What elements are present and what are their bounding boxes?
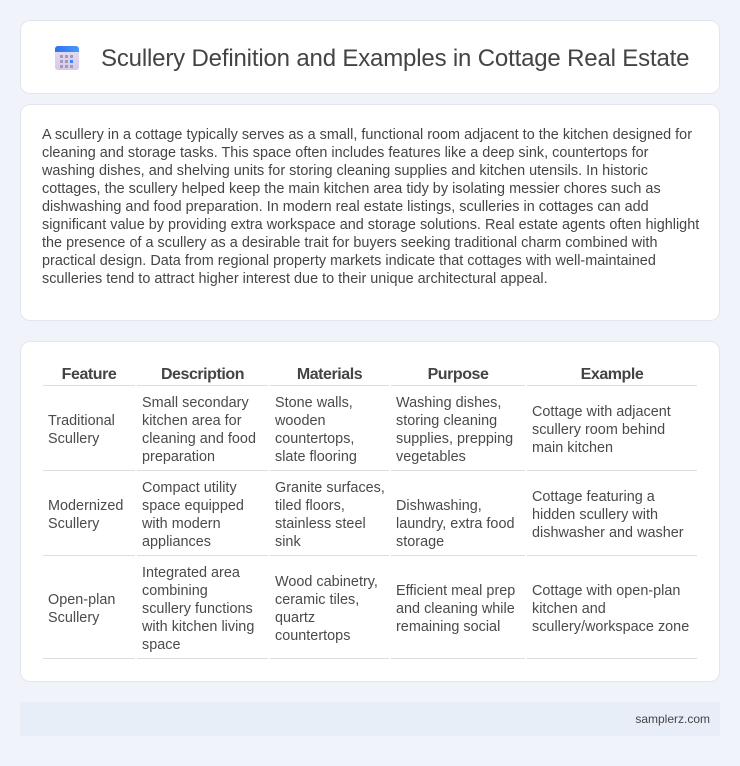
icon: calendar <box>55 46 79 70</box>
row 3 materials: countertops <box>275 628 350 644</box>
row 1 description: kitchen area for <box>142 413 242 429</box>
row 2 purpose: storage <box>396 534 444 550</box>
row 3 materials: Wood cabinetry, <box>275 574 378 590</box>
row 1 materials: countertops, <box>275 431 354 447</box>
column heading: Example <box>527 365 697 386</box>
row 3 purpose <box>396 583 515 635</box>
row 3 feature: Open-plan <box>48 592 115 608</box>
row 3 purpose: Efficient meal prep <box>396 583 515 599</box>
row 2 example: hidden scullery with <box>532 507 658 523</box>
column heading: Feature: Feature <box>62 366 116 383</box>
row 2 feature: Scullery <box>48 516 99 532</box>
row 1 materials: wooden <box>275 413 326 429</box>
column heading: Feature <box>43 365 135 386</box>
row 3 example: scullery/workspace zone <box>532 619 689 635</box>
panel: description paragraph: dishwashing and food preparation. In modern real estate listings, sculleries in cottages can add <box>42 199 649 215</box>
row 2 materials: tiled floors, <box>275 498 345 514</box>
row 1 purpose: storing cleaning <box>396 413 497 429</box>
row 2 feature: Modernized <box>48 498 123 514</box>
row 2 example <box>532 489 684 541</box>
panel: description paragraph: the presence of a scullery as a desirable trait for buyers seeking traditional charm combined with <box>42 235 657 251</box>
row 3 description <box>142 565 254 653</box>
row 2 materials: stainless steel <box>275 516 366 532</box>
panel: description paragraph <box>20 104 720 321</box>
header panel <box>20 20 720 94</box>
row 1 description: cleaning and food <box>142 431 256 447</box>
row 3 description: Integrated area <box>142 565 240 581</box>
panel: table card <box>20 341 720 682</box>
row 3 example: kitchen and <box>532 601 606 617</box>
row 1 feature <box>48 413 115 447</box>
row 2 purpose <box>396 498 515 550</box>
panel: description paragraph: A scullery in a cottage typically serves as a small, functional room adjacent to the kitchen designed for <box>42 127 692 143</box>
column heading: Materials: Materials <box>297 366 362 383</box>
panel: description paragraph: washing dishes, and shelving units for storing cleaning supplies and kitchen utensils. In historic <box>42 163 648 179</box>
row 1 materials: slate flooring <box>275 449 357 465</box>
row 1 example: scullery room behind <box>532 422 665 438</box>
row 3 example <box>532 583 689 635</box>
row 3 feature: Scullery <box>48 610 99 626</box>
title: Scullery Definition and Examples in Cottage Real Estate <box>101 45 689 72</box>
row 2 description: appliances <box>142 534 211 550</box>
row 3 description: with kitchen living <box>142 619 254 635</box>
row 1 example: main kitchen <box>532 440 613 456</box>
panel: description paragraph: practical design. Data from regional property markets indicate that cottages with well-maintained <box>42 253 656 269</box>
row 2 example: dishwasher and washer <box>532 525 684 541</box>
panel: description paragraph: significant value by providing extra workspace and storage solutions. Real estate agents often highlight <box>42 217 699 233</box>
row 1 feature: Scullery <box>48 431 99 447</box>
row 2 feature <box>48 498 123 532</box>
panel: description paragraph: sculleries tend to attract higher interest due to their unique architectural appeal. <box>42 271 548 287</box>
row 3 materials: ceramic tiles, <box>275 592 359 608</box>
row 1 example <box>532 404 671 456</box>
panel: description paragraph: cleaning and storage tasks. This space often includes features like a deep sink, countertops for <box>42 145 648 161</box>
row 2 materials: sink <box>275 534 301 550</box>
column heading: Description <box>137 365 268 386</box>
row 2 purpose: laundry, extra food <box>396 516 515 532</box>
column heading: Purpose: Purpose <box>428 366 488 383</box>
row 2 example: Cottage featuring a <box>532 489 655 505</box>
row 2 materials: Granite surfaces, <box>275 480 385 496</box>
footer source text: samplerz.com <box>635 712 710 726</box>
row 3 materials <box>275 574 378 644</box>
row 2 description: space equipped <box>142 498 244 514</box>
row 1 example: Cottage with adjacent <box>532 404 671 420</box>
row 1 description <box>142 395 256 465</box>
row 1 description: Small secondary <box>142 395 249 411</box>
row 2 description: with modern <box>142 516 221 532</box>
row 3 materials: quartz <box>275 610 315 626</box>
row 2 description <box>142 480 244 550</box>
row 1 purpose: vegetables <box>396 449 466 465</box>
column heading: Materials <box>270 365 389 386</box>
row 3 description: scullery functions <box>142 601 253 617</box>
row 1 feature: Traditional <box>48 413 115 429</box>
row 1 purpose: Washing dishes, <box>396 395 501 411</box>
panel: description paragraph: cottages, the scullery helped keep the main kitchen area tidy by isolating messier chores such as <box>42 181 661 197</box>
row 3 purpose: remaining social <box>396 619 500 635</box>
row 1 purpose <box>396 395 513 465</box>
row 3 description: space <box>142 637 181 653</box>
footer bar <box>20 702 720 736</box>
row 1 materials: Stone walls, <box>275 395 353 411</box>
row 3 example: Cottage with open-plan <box>532 583 680 599</box>
row 1 description: preparation <box>142 449 215 465</box>
column heading: Description: Description <box>161 366 244 383</box>
row 1 materials <box>275 395 357 465</box>
column heading: Purpose <box>391 365 525 386</box>
row 3 description: combining <box>142 583 208 599</box>
row 1 purpose: supplies, prepping <box>396 431 513 447</box>
row 2 materials <box>275 480 385 550</box>
row 3 feature <box>48 592 115 626</box>
column heading: Example: Example <box>581 366 643 383</box>
row 2 description: Compact utility <box>142 480 237 496</box>
row 3 purpose: and cleaning while <box>396 601 515 617</box>
row 2 purpose: Dishwashing, <box>396 498 482 514</box>
